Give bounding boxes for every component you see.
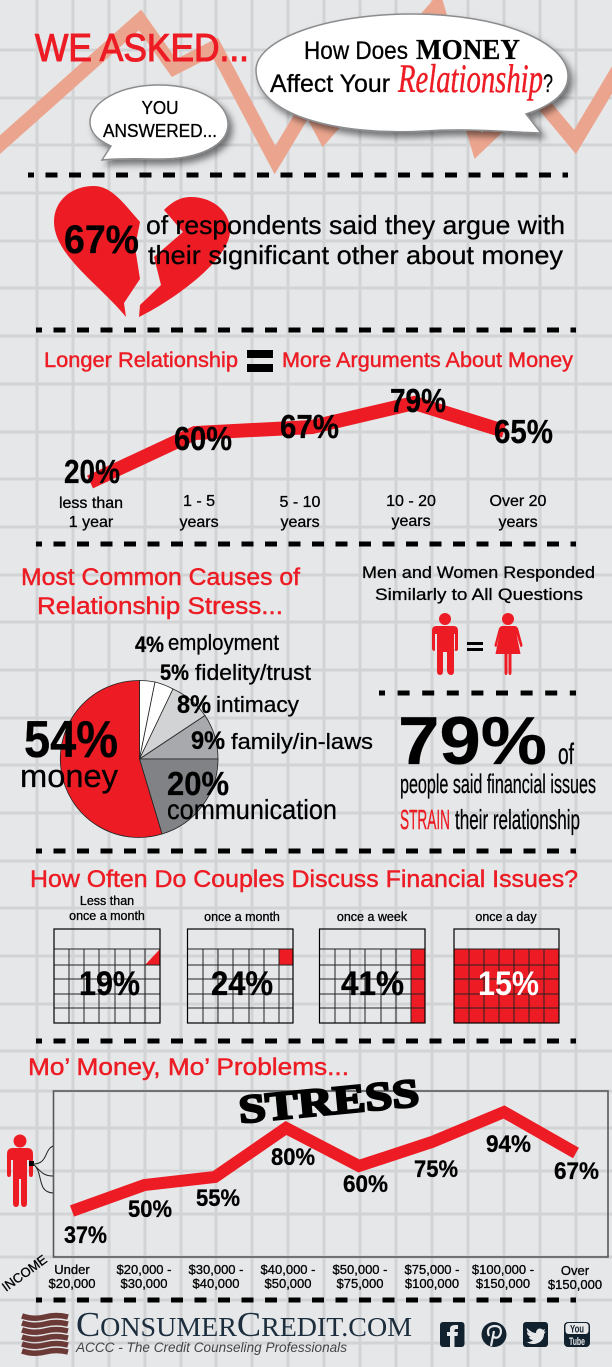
logo: consumercredit flag xyxy=(22,1316,68,1353)
divider xyxy=(36,1038,576,1044)
heading: most common causes: Most Common Causes of xyxy=(21,564,300,591)
line chart: arguments by relationship length xyxy=(59,382,553,531)
line chart: stress by income: 80% xyxy=(271,1144,315,1171)
zigzag background line xyxy=(0,6,612,160)
pie labels: 54% xyxy=(24,711,118,769)
calendar: less than once a month: 19% xyxy=(79,965,140,1003)
speech bubble: you answered: ANSWERED... xyxy=(103,121,217,141)
calendar: once a month: 24% xyxy=(211,965,273,1003)
income axis labels: $100,000 - xyxy=(472,1262,534,1277)
heading: most common causes: Relationship Stress... xyxy=(37,593,283,620)
stat: 79% financial strain xyxy=(398,703,596,835)
divider xyxy=(36,328,576,332)
line chart: arguments by relationship length: 60% xyxy=(174,420,232,457)
pie labels: communication xyxy=(167,794,337,825)
speech bubble: question xyxy=(256,14,568,133)
line chart: arguments by relationship length: 1 - 5 xyxy=(183,493,215,510)
icon: facebook xyxy=(440,1322,464,1347)
text: men and women responded similarly: Similarly to All Questions xyxy=(375,585,583,604)
line chart: stress by income: 75% xyxy=(414,1156,458,1183)
line chart: stress by income: 67% xyxy=(554,1158,599,1185)
speech bubble: question: How Does xyxy=(304,37,408,65)
stat: 79% financial strain: 79% xyxy=(398,703,547,779)
line chart: arguments by relationship length: 65% xyxy=(494,413,553,450)
heading: longer relationship equals more arguments: Longer Relationship xyxy=(44,349,238,372)
stress stamp: STRESS xyxy=(237,1070,421,1132)
heading: most common causes xyxy=(21,564,300,620)
income axis labels: $75,000 xyxy=(336,1276,384,1291)
divider xyxy=(36,1298,576,1302)
income axis labels: $150,000 xyxy=(548,1277,602,1292)
icon: man equals woman xyxy=(432,613,522,675)
heading: how often: How Often Do Couples Discuss Financial Issues? xyxy=(30,866,578,893)
income axis labels: $40,000 xyxy=(192,1276,240,1291)
heading: longer relationship equals more arguments: More Arguments About Money xyxy=(282,349,573,372)
text: men and women responded similarly xyxy=(362,563,595,604)
pie labels: fidelity/trust xyxy=(195,660,311,685)
pie labels: money xyxy=(20,758,118,794)
income axis labels: $40,000 - xyxy=(261,1262,315,1277)
icon: broken heart xyxy=(54,186,230,317)
income axis labels: $30,000 xyxy=(120,1276,168,1291)
calendar: once a day: 15% xyxy=(478,965,539,1003)
speech bubble: you answered: YOU xyxy=(142,98,178,118)
pie labels: 4% xyxy=(135,632,164,657)
line chart: arguments by relationship length: 79% xyxy=(390,382,446,419)
calendar labels: once a day xyxy=(475,910,537,924)
stat: 67% argue about money xyxy=(64,210,565,270)
calendar: less than once a month xyxy=(54,929,160,1023)
divider xyxy=(36,542,576,546)
line chart: arguments by relationship length: years xyxy=(179,514,219,531)
line chart: arguments by relationship length: years xyxy=(498,514,538,531)
income axis labels: $150,000 xyxy=(476,1276,530,1291)
stat: 67% argue about money: their significant other about money xyxy=(148,240,563,270)
divider xyxy=(379,690,576,696)
line chart: stress by income: 60% xyxy=(343,1171,388,1198)
logo wordmark: ACCC - The Credit Counseling Professionals xyxy=(75,1340,347,1355)
icon: youtube xyxy=(564,1322,590,1348)
income axis labels: $100,000 xyxy=(405,1276,459,1291)
divider xyxy=(36,848,576,854)
calendar labels: once a week xyxy=(337,910,408,924)
line chart: stress by income: 55% xyxy=(196,1185,240,1212)
icon: twitter xyxy=(523,1322,548,1347)
pie labels: intimacy xyxy=(216,692,299,717)
stat: 67% argue about money: 67% xyxy=(64,218,139,262)
income axis labels: $20,000 - xyxy=(117,1262,171,1277)
income axis labels: $20,000 xyxy=(48,1276,96,1291)
chart frame xyxy=(54,1091,608,1257)
heading: we asked: WE ASKED... xyxy=(35,27,249,70)
speech bubble: question: Relationship xyxy=(397,56,543,101)
icon: pinterest xyxy=(482,1322,506,1347)
pie labels: employment xyxy=(168,630,279,655)
speech bubble: question: MONEY xyxy=(416,35,520,66)
line chart: arguments by relationship length: 5 - 10 xyxy=(280,494,321,511)
income axis labels: $30,000 - xyxy=(189,1262,243,1277)
logo wordmark: CONSUMERCREDIT.COM xyxy=(76,1305,412,1344)
calendar labels: once a month xyxy=(204,910,280,924)
calendar: once a day xyxy=(454,929,559,1023)
line chart: arguments by relationship length: years xyxy=(280,514,320,531)
pie labels: family/in-laws xyxy=(231,729,373,754)
line chart: stress by income: 50% xyxy=(128,1196,172,1223)
line chart: arguments by relationship length: Over 20 xyxy=(490,493,547,510)
pie labels: 20% xyxy=(167,765,229,802)
income axis labels: $50,000 xyxy=(264,1276,312,1291)
icon: youtube: Tube xyxy=(569,1336,585,1348)
pie labels: 8% xyxy=(177,691,211,719)
income axis labels: $50,000 - xyxy=(333,1262,387,1277)
line chart: arguments by relationship length: 20% xyxy=(64,453,120,490)
line chart: arguments by relationship length: years xyxy=(391,513,431,530)
income axis labels: $75,000 - xyxy=(405,1262,459,1277)
heading: longer relationship equals more arguments xyxy=(44,349,573,372)
line chart: stress by income: 37% xyxy=(64,1222,107,1249)
speech bubble: question: Affect Your xyxy=(270,70,390,98)
divider xyxy=(28,172,568,178)
pie chart: causes of stress xyxy=(60,680,218,837)
income axis labels: Under xyxy=(54,1262,90,1277)
income axis labels xyxy=(0,1252,602,1294)
calendar: once a week: 41% xyxy=(341,965,404,1003)
calendar: once a month xyxy=(188,929,293,1023)
line chart: arguments by relationship length: 1 year xyxy=(69,514,114,531)
stat: 79% financial strain: STRAIN xyxy=(400,804,450,835)
line chart: stress by income: 94% xyxy=(486,1131,531,1158)
line chart: arguments by relationship length: 67% xyxy=(280,408,339,445)
icon: man wired to chart xyxy=(7,1134,53,1207)
calendar labels: Less than xyxy=(80,894,134,908)
pie labels: 9% xyxy=(191,727,225,755)
line chart: arguments by relationship length: 10 - 20 xyxy=(386,493,436,510)
pie labels xyxy=(20,630,373,825)
heading: mo money mo problems: Mo’ Money, Mo’ Problems... xyxy=(28,1054,349,1081)
speech bubble: question: ? xyxy=(543,70,553,98)
text: men and women responded similarly: Men and Women Responded xyxy=(362,563,595,582)
icon: youtube: You xyxy=(570,1324,584,1336)
income axis labels: Over xyxy=(561,1263,590,1278)
calendar labels: once a month xyxy=(69,909,145,923)
stat: 79% financial strain: of xyxy=(558,738,574,771)
line chart: stress by income xyxy=(64,1112,599,1249)
speech bubble: you answered xyxy=(90,85,228,160)
pie labels: 5% xyxy=(160,660,189,685)
stat: 67% argue about money: of respondents said they argue with xyxy=(146,210,565,240)
income axis labels: INCOME xyxy=(0,1252,50,1294)
calendar: once a week xyxy=(320,929,425,1023)
line chart: arguments by relationship length: less than xyxy=(59,495,123,512)
calendar labels xyxy=(69,894,537,924)
